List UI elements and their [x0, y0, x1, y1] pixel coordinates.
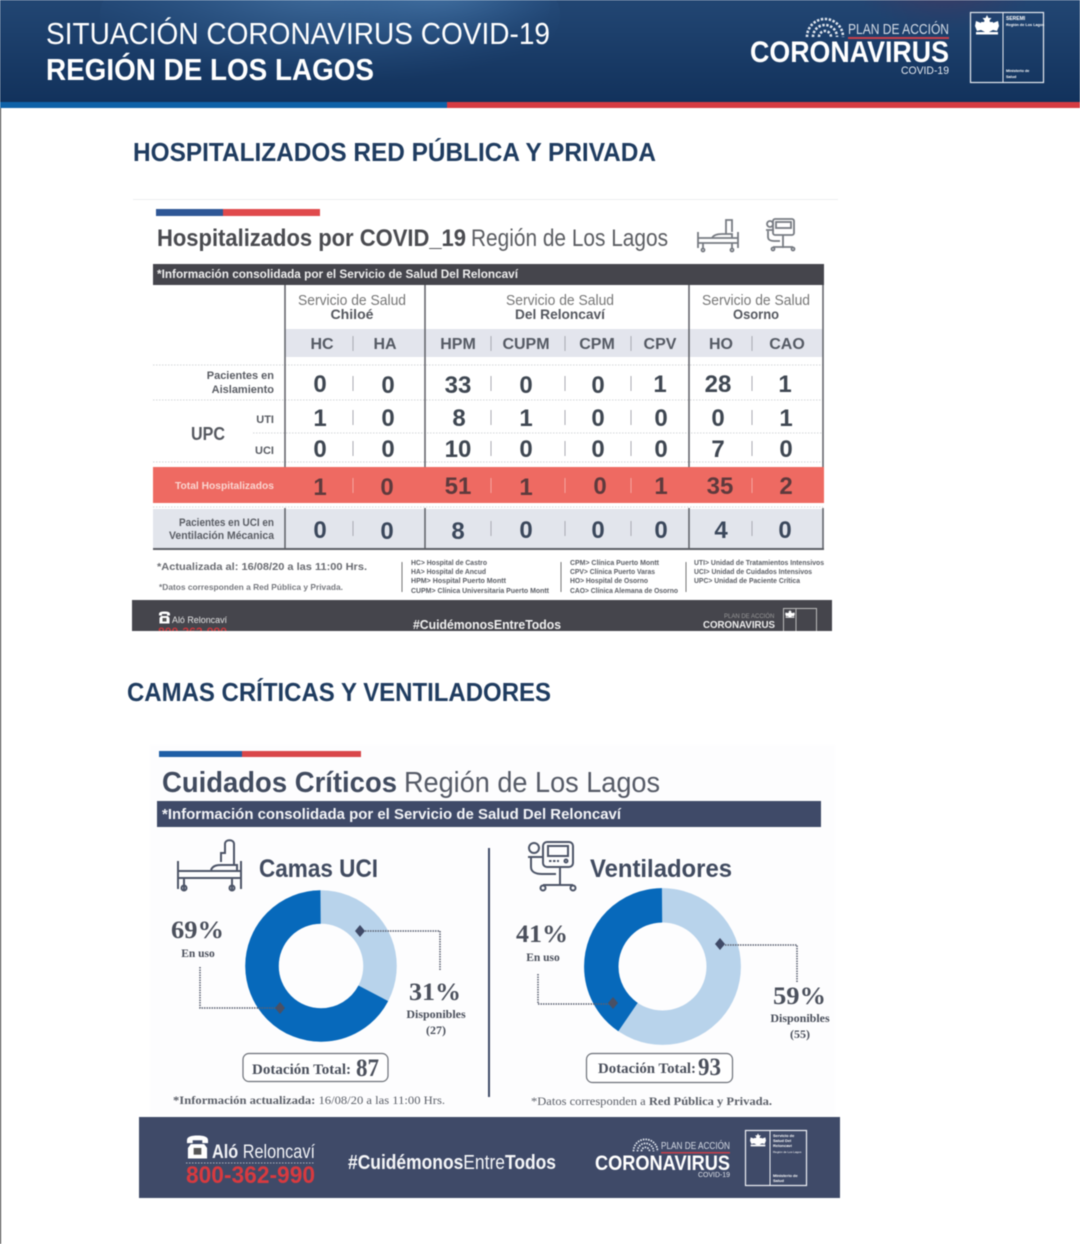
service headers: Osorno	[733, 306, 779, 322]
column codes: CPM	[579, 336, 615, 353]
update notes	[157, 561, 367, 592]
service headers: Chiloé	[330, 306, 374, 322]
callout: en uso 41	[516, 921, 618, 1009]
table footer strip: CORONAVIRUS	[703, 619, 775, 631]
column codes	[310, 336, 805, 353]
row: UTI: 0	[654, 405, 668, 432]
column codes: CUPM	[502, 336, 550, 353]
info bar: *Información consolidada por el Servicio de Salud Del Reloncaví	[162, 806, 622, 823]
row: total hospitalizados: 35	[707, 473, 733, 500]
icon: hospital bed	[698, 220, 738, 252]
info bar	[153, 264, 824, 285]
row: total hospitalizados: 51	[445, 473, 471, 500]
logo: plan de acción coronavirus: COVID-19	[901, 65, 949, 77]
logo: servicio de salud: Salud	[773, 1178, 784, 1183]
logo: servicio de salud: Ministerio de	[773, 1173, 798, 1178]
row: UCI: 0	[591, 436, 605, 463]
row: UCI: 0	[313, 436, 327, 463]
row: UTI	[313, 405, 793, 432]
callout: en uso 41: 41%	[516, 921, 568, 948]
column header band	[285, 329, 823, 357]
column codes: HO	[709, 336, 733, 353]
row labels: Aislamiento	[212, 384, 274, 396]
logo: plan de acción coronavirus: CORONAVIRUS	[595, 1152, 730, 1175]
info bar: *Información consolidada por el Servicio de Salud Del Reloncaví	[157, 267, 519, 281]
total box: Dotación Total:	[252, 1062, 351, 1078]
logo: servicio de salud: Región de Los Lagos	[773, 1150, 802, 1154]
total box: 87	[356, 1055, 379, 1082]
legend: hospital codes: HC> Hospital de Castro	[411, 560, 487, 567]
panel: cuidados críticos	[139, 745, 840, 1198]
service headers: Servicio de Salud	[702, 292, 810, 309]
callout: en uso 69: 69%	[171, 917, 224, 944]
row labels: UPC	[191, 424, 225, 444]
divider	[488, 848, 490, 1097]
panel title: Cuidados Críticos	[162, 767, 397, 799]
column codes: HC	[310, 336, 334, 353]
row: ventilación mecánica: 0	[313, 517, 327, 544]
legend: hospital codes: HO> Hospital de Osorno	[570, 578, 648, 585]
callout: disponibles 59: 59%	[773, 983, 826, 1010]
row labels: UCI	[255, 445, 274, 457]
callout: disponibles 59: (55)	[790, 1027, 810, 1041]
footer banner	[139, 1117, 840, 1198]
row: total hospitalizados: 1	[519, 474, 533, 501]
row: pacientes en aislamiento: 1	[778, 371, 792, 398]
icon: ventilator	[528, 842, 576, 890]
logo: seremi de salud: SEREMI	[1006, 16, 1026, 22]
callout: disponibles 31: Disponibles	[406, 1007, 466, 1021]
header title	[46, 16, 550, 87]
panel title	[162, 767, 660, 799]
row: ventilación mecánica: 4	[714, 517, 728, 544]
icon: phone	[187, 1136, 208, 1158]
row: pacientes en aislamiento: 0	[591, 372, 605, 399]
header title: REGIÓN DE LOS LAGOS	[46, 51, 374, 87]
donut chart: camas uci	[262, 907, 380, 1025]
logo: servicio de salud: Servicio de	[773, 1133, 795, 1138]
accent bar	[156, 209, 320, 216]
service headers	[298, 292, 810, 322]
legend: hospital codes	[411, 560, 824, 595]
logo: plan de acción coronavirus: COVID-19	[698, 1172, 730, 1179]
row: total hospitalizados: 0	[593, 473, 607, 500]
header banner	[0, 0, 1080, 108]
table title: Región de Los Lagos	[471, 225, 668, 252]
note: *Datos corresponden a Red Pública y Privada.	[531, 1094, 772, 1108]
legend: hospital codes: UTI> Unidad de Tratamientos Intensivos	[694, 560, 824, 567]
service headers: Del Reloncaví	[515, 306, 606, 322]
row: UCI	[313, 436, 793, 463]
legend: hospital codes: CAO> Clínica Alemana de Osorno	[570, 588, 678, 595]
row: ventilación mecánica	[313, 517, 792, 545]
helpline	[186, 1142, 316, 1189]
table footer strip: Aló Reloncaví	[172, 615, 227, 625]
legend: hospital codes: UCI> Unidad de Cuidados Intensivos	[694, 569, 812, 576]
row: ventilación mecánica: 0	[380, 518, 394, 545]
service headers: Servicio de Salud	[506, 292, 614, 309]
total box: Dotación Total:	[598, 1061, 696, 1077]
logo: servicio de salud: Reloncaví	[773, 1143, 793, 1148]
table footer strip: #CuidémonosEntreTodos	[413, 617, 561, 632]
row: UCI: 0	[519, 436, 533, 463]
logo: seremi de salud: Región de Los Lagos	[1006, 23, 1044, 27]
total row background	[153, 467, 824, 503]
row: UTI: 0	[381, 405, 395, 432]
total box	[243, 1054, 388, 1082]
panel title: Región de Los Lagos	[404, 767, 660, 799]
helpline: 800-362-990	[186, 1162, 315, 1189]
column codes: CPV	[644, 336, 677, 353]
subheading: Camas UCI	[259, 855, 378, 883]
heading: camas críticas: CAMAS CRÍTICAS Y VENTILADORES	[127, 677, 551, 707]
callout: en uso 41: En uso	[526, 952, 560, 964]
callout: en uso 69: En uso	[181, 948, 215, 960]
camas uci block	[171, 840, 466, 1107]
legend: hospital codes: UPC> Unidad de Paciente Crítica	[694, 578, 800, 585]
icon: ventilator	[766, 219, 794, 250]
row: pacientes en aislamiento: 28	[705, 371, 731, 398]
total box	[586, 1054, 732, 1082]
row: ventilación mecánica: 0	[778, 517, 792, 544]
row: pacientes en aislamiento: 33	[445, 372, 471, 399]
callout: disponibles 31	[355, 925, 466, 1037]
service headers: Servicio de Salud	[298, 292, 406, 309]
row: ventilación mecánica: 0	[519, 517, 533, 544]
subheading: Ventiladores	[590, 855, 732, 883]
row: total hospitalizados: 2	[779, 473, 793, 500]
panel: hospitalizados table	[132, 199, 838, 639]
table title	[157, 225, 668, 252]
table footer strip	[131, 599, 833, 632]
callout: disponibles 31: (27)	[426, 1023, 446, 1037]
legend: hospital codes: CPV> Clínica Puerto Varas	[570, 569, 655, 576]
icon: hospital bed	[178, 840, 241, 891]
page left edge	[0, 0, 1, 1244]
logo: plan de acción coronavirus: CORONAVIRUS	[750, 36, 949, 69]
row: UCI: 0	[779, 436, 793, 463]
row: UTI: 1	[313, 405, 327, 432]
note: *Información actualizada: 16/08/20 a las 11:00 Hrs.	[173, 1093, 445, 1107]
row labels	[169, 370, 275, 542]
table title: Hospitalizados por COVID_19	[157, 225, 466, 252]
row labels: Total Hospitalizados	[175, 481, 274, 492]
row: total hospitalizados	[313, 473, 793, 501]
total box: 93	[698, 1054, 721, 1081]
callout: disponibles 59	[715, 938, 830, 1041]
row: pacientes en aislamiento: 0	[381, 372, 395, 399]
legend: hospital codes: CUPM> Clínica Universitaria Puerto Montt	[411, 588, 550, 595]
ventilation row background	[153, 509, 824, 548]
logo: plan de acción coronavirus	[750, 19, 949, 77]
column codes: HA	[373, 336, 397, 353]
row labels: UTI	[256, 414, 274, 426]
row: UTI: 0	[711, 405, 725, 432]
column codes: HPM	[440, 336, 476, 353]
row: UTI: 0	[591, 405, 605, 432]
legend: hospital codes: HPM> Hospital Puerto Montt	[411, 578, 507, 585]
row: UCI: 0	[381, 436, 395, 463]
logo: plan de acción coronavirus: PLAN DE ACCIÓN	[848, 21, 949, 38]
logo: seremi de salud: Ministerio de	[1006, 69, 1029, 73]
row: pacientes en aislamiento: 1	[653, 371, 667, 398]
row: ventilación mecánica: 8	[451, 518, 465, 545]
row: UTI: 1	[779, 405, 793, 432]
callout: disponibles 31: 31%	[409, 979, 461, 1006]
update notes: *Actualizada al: 16/08/20 a las 11:00 Hrs.	[157, 561, 367, 573]
row: ventilación mecánica: 0	[654, 517, 668, 544]
callout: en uso 69	[171, 917, 285, 1014]
header title: SITUACIÓN CORONAVIRUS COVID-19	[46, 16, 550, 51]
callout: disponibles 59: Disponibles	[770, 1011, 830, 1025]
row labels: Pacientes en	[207, 370, 274, 382]
logo: plan de acción coronavirus	[595, 1139, 730, 1179]
logo: seremi de salud: Salud	[1006, 75, 1017, 79]
heading: hospitalizados: HOSPITALIZADOS RED PÚBLICA Y PRIVADA	[133, 137, 656, 167]
logo: servicio de salud: Salud Del	[773, 1138, 791, 1143]
donut chart: ventiladores	[601, 905, 724, 1028]
logo: servicio de salud	[746, 1130, 806, 1186]
table footer strip: 800-362-990	[158, 625, 227, 639]
row: UTI: 1	[519, 405, 533, 432]
row: UCI: 10	[445, 436, 471, 463]
hashtag: #CuidémonosEntreTodos	[348, 1152, 556, 1174]
row: pacientes en aislamiento	[313, 371, 792, 399]
row: total hospitalizados: 0	[380, 474, 394, 501]
row: ventilación mecánica: 0	[591, 517, 605, 544]
row: UCI: 0	[654, 436, 668, 463]
row: UCI: 7	[711, 436, 725, 463]
row: total hospitalizados: 1	[654, 473, 668, 500]
helpline: Aló Reloncaví	[212, 1142, 316, 1163]
row labels: Pacientes en UCI en	[179, 517, 274, 529]
update notes: *Datos corresponden a Red Pública y Privada.	[159, 582, 343, 592]
row: UTI: 8	[452, 405, 466, 432]
table footer strip: PLAN DE ACCIÓN	[724, 613, 774, 620]
legend: hospital codes: CPM> Clínica Puerto Montt	[570, 560, 660, 567]
row labels: Ventilación Mécanica	[169, 530, 275, 542]
info bar	[157, 801, 821, 827]
legend: hospital codes: HA> Hospital de Ancud	[411, 569, 486, 576]
column codes: CAO	[769, 336, 805, 353]
logo: seremi de salud	[970, 12, 1044, 82]
row: total hospitalizados: 1	[313, 474, 327, 501]
logo: plan de acción coronavirus: PLAN DE ACCIÓN	[661, 1139, 730, 1152]
accent bar	[159, 751, 361, 757]
ventiladores block	[516, 842, 830, 1108]
row: pacientes en aislamiento: 0	[519, 372, 533, 399]
row: pacientes en aislamiento: 0	[313, 371, 327, 398]
